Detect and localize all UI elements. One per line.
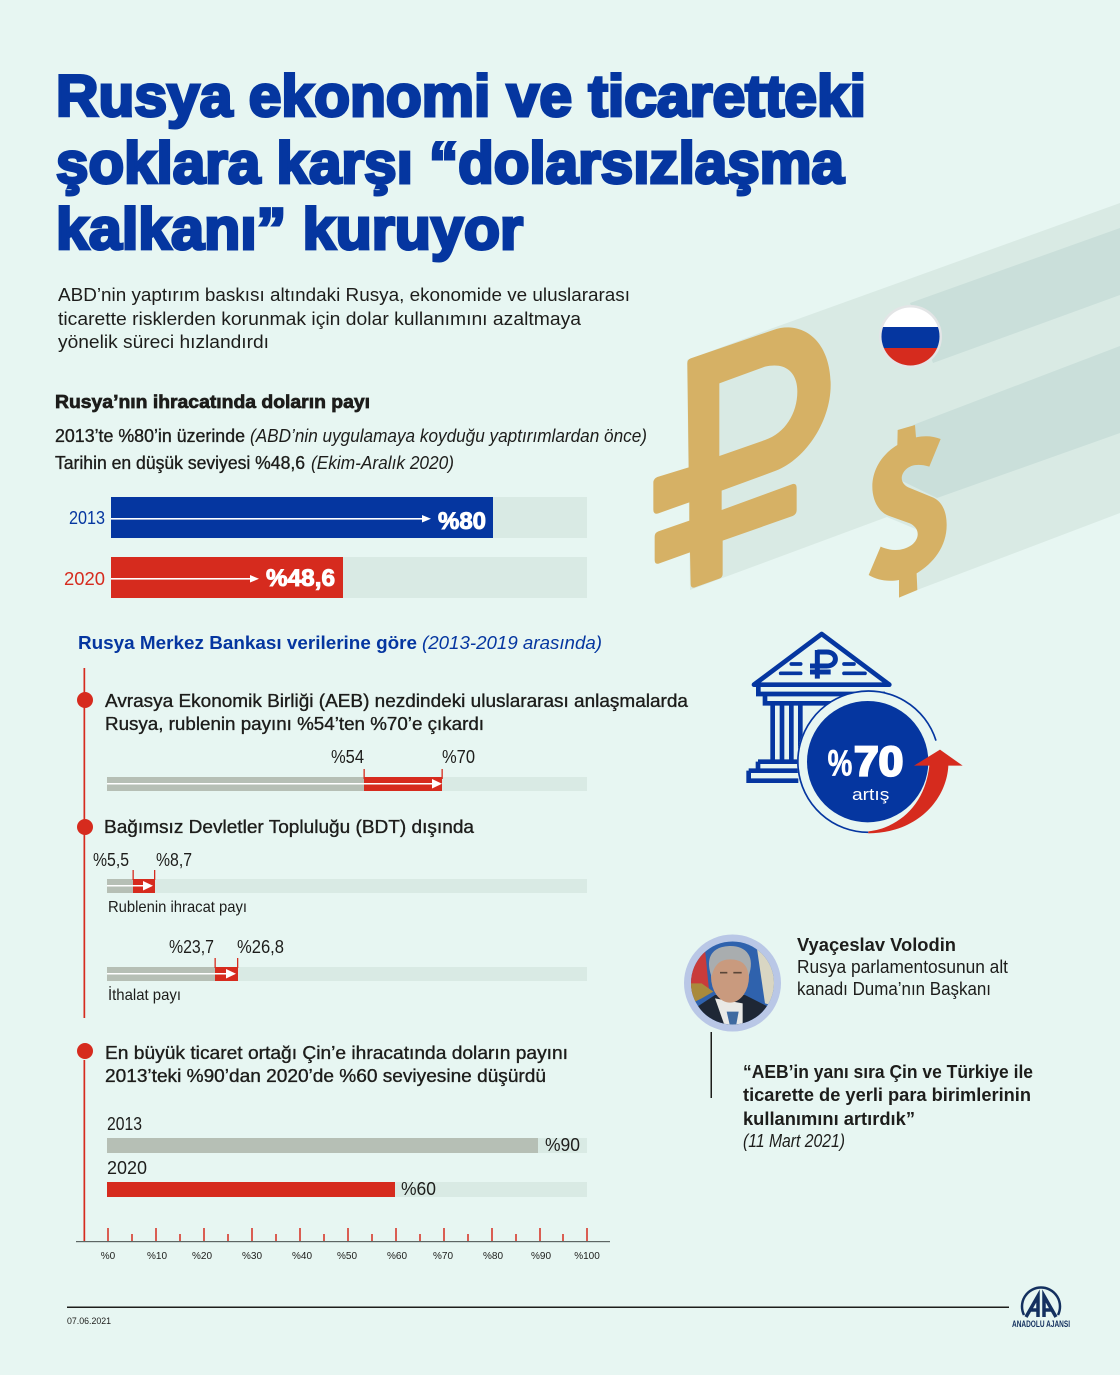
intro text: ticarette risklerden korunmak için dolar kullanımını azaltmaya <box>58 309 582 329</box>
arrow: red upward curve <box>868 750 963 833</box>
bar chart: China dollar share: %60 <box>401 1179 436 1199</box>
range chart: import share <box>107 937 587 1004</box>
axis: percent scale: %50 <box>337 1251 357 1262</box>
item: AEB agreements: Avrasya Ekonomik Birliği (AEB) nezdindeki uluslararası anlaşmalarda <box>105 691 689 711</box>
item: BDT heading: Bağımsız Devletler Topluluğu (BDT) dışında <box>104 817 475 837</box>
quote connector line <box>710 1032 712 1098</box>
icon: central bank with 70 percent badge <box>749 634 963 833</box>
icon: Russian flag badge <box>879 305 942 368</box>
bar: 2020: %48,6 <box>266 565 335 592</box>
item: China trade: 2013’teki %90’dan 2020’de %60 seviyesine düşürdü <box>105 1066 546 1086</box>
badge: 70 percent increase: artış <box>852 785 889 804</box>
quote: ticarette de yerli para birimlerinin <box>743 1085 1031 1105</box>
badge: 70 percent increase <box>797 691 938 832</box>
axis: percent scale: %40 <box>292 1251 312 1262</box>
icon: dollar symbol <box>869 425 947 598</box>
footer rule <box>67 1306 1009 1308</box>
speaker name and role <box>797 935 1008 999</box>
timeline: red vertical lines and dots <box>77 668 93 1241</box>
title: Rusya ekonomi ve ticaretteki <box>56 64 866 129</box>
item: AEB agreements: Rusya, rublenin payını %54’ten %70’e çıkardı <box>105 714 484 734</box>
illustration: ruble, dollar and flag with long shadows <box>653 203 1120 598</box>
section facts: (Ekim-Aralık 2020) <box>311 453 454 473</box>
range chart: ruble export share: %5,5 <box>93 850 129 870</box>
bar: 2020 <box>64 557 587 598</box>
range chart: ruble export share: %8,7 <box>156 850 192 870</box>
section facts: (ABD’nin uygulamaya koyduğu yaptırımlardan önce) <box>250 426 647 446</box>
date: 07.06.2021 <box>67 1316 111 1326</box>
range chart: import share: İthalat payı <box>108 985 181 1004</box>
bar: 2013: 2013 <box>69 508 105 528</box>
range chart: ruble export share: Rublenin ihracat payı <box>108 899 247 916</box>
axis: percent scale: %30 <box>242 1251 262 1262</box>
intro text <box>58 285 630 352</box>
axis: percent scale: %100 <box>574 1251 600 1262</box>
title: kalkanı” kuruyor <box>56 197 523 262</box>
title <box>56 64 866 262</box>
speaker name and role: kanadı Duma’nın Başkanı <box>797 979 991 999</box>
axis: percent scale: %0 <box>101 1251 116 1262</box>
quote: kullanımını artırdık” <box>743 1109 915 1129</box>
quote <box>743 1062 1033 1151</box>
speaker name and role: Vyaçeslav Volodin <box>797 935 956 955</box>
section facts: Tarihin en düşük seviyesi %48,6 <box>55 453 305 473</box>
axis: percent scale: %80 <box>483 1251 503 1262</box>
section heading: central bank data <box>78 633 602 653</box>
icon: bank building <box>749 634 889 781</box>
intro text: yönelik süreci hızlandırdı <box>58 332 269 352</box>
range bar: AEB <box>107 769 587 791</box>
quote: “AEB’in yanı sıra Çin ve Türkiye ile <box>743 1062 1033 1082</box>
axis: percent scale: %10 <box>147 1251 167 1262</box>
item: China trade: En büyük ticaret ortağı Çin’e ihracatında doların payını <box>105 1043 568 1063</box>
bar chart: dollar share 2013 vs 2020 <box>64 497 587 598</box>
bar chart: China dollar share: %90 <box>545 1135 580 1155</box>
axis: percent scale: %60 <box>387 1251 407 1262</box>
section facts <box>55 426 647 473</box>
bar chart: China dollar share: 2020 <box>107 1158 147 1178</box>
badge: 70 percent increase: 70 <box>854 738 903 784</box>
range chart: import share: %26,8 <box>237 937 284 957</box>
axis: percent scale: %70 <box>433 1251 453 1262</box>
logo: Anadolu Ajansı: ANADOLU AJANSI <box>1012 1319 1070 1329</box>
bar: 2013: %80 <box>438 508 486 535</box>
icon: ruble symbol <box>653 327 831 588</box>
range chart: import share: %23,7 <box>169 937 214 957</box>
speaker name and role: Rusya parlamentosunun alt <box>797 957 1008 977</box>
axis: percent scale: %90 <box>531 1251 551 1262</box>
item: AEB agreements <box>105 691 689 791</box>
intro text: ABD’nin yaptırım baskısı altındaki Rusya, ekonomide ve uluslararası <box>58 285 630 305</box>
section heading: central bank data: Rusya Merkez Bankası verilerine göre <box>78 633 417 653</box>
title: şoklara karşı “dolarsızlaşma <box>56 131 845 196</box>
bar: 2013 <box>69 497 587 538</box>
range chart: ruble export share <box>93 850 587 916</box>
logo: Anadolu Ajansı <box>1012 1288 1070 1329</box>
item: AEB agreements: %70 <box>442 747 475 767</box>
portrait: Vyaçeslav Volodin <box>684 934 781 1032</box>
badge: 70 percent increase: % <box>828 742 852 783</box>
quote: (11 Mart 2021) <box>743 1131 845 1151</box>
bar chart: China dollar share <box>107 1114 587 1199</box>
item: China trade <box>105 1043 568 1086</box>
axis: percent scale: %20 <box>192 1251 212 1262</box>
axis: percent scale <box>76 1228 610 1262</box>
item: AEB agreements: %54 <box>331 747 364 767</box>
bar: 2020: 2020 <box>64 569 105 589</box>
section facts: 2013’te %80’in üzerinde <box>55 426 245 446</box>
section heading: central bank data: (2013-2019 arasında) <box>422 633 602 653</box>
bar chart: China dollar share: 2013 <box>107 1114 142 1134</box>
section heading: dollar share in exports: Rusya’nın ihracatında doların payı <box>55 392 370 412</box>
